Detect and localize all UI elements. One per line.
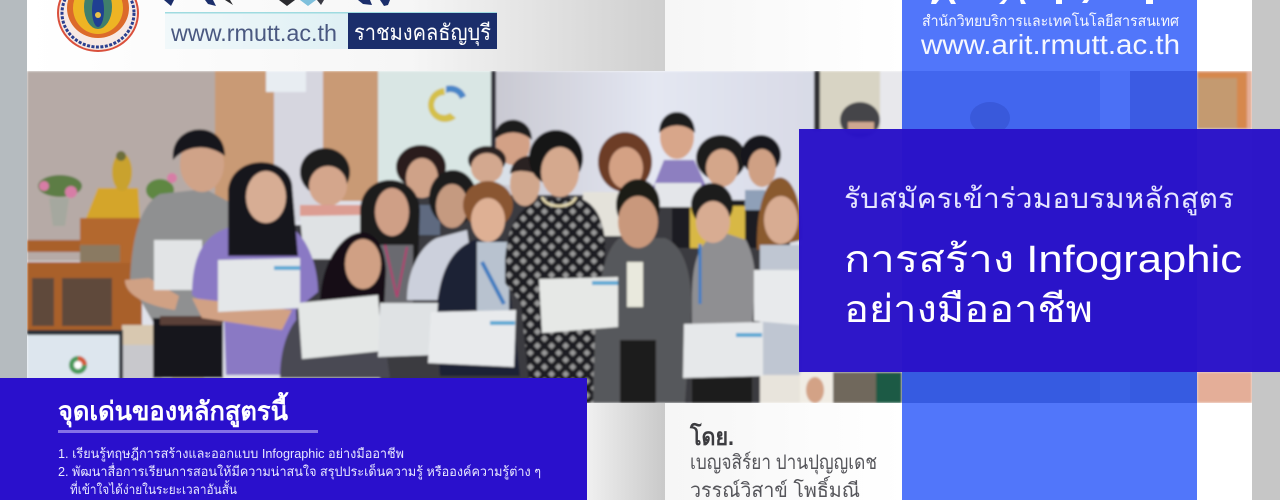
woman with auburn hair [757,177,802,403]
man in grey shirt [125,129,233,378]
ARIT website: www.arit.rmutt.ac.th [920,29,1180,60]
man top left at back [494,120,532,185]
woman with glasses and lanyard [360,180,420,305]
highlights heading: จุดเด่นของหลักสูตรนี้ [58,391,289,428]
highlight list [58,446,541,497]
title: line 2: การสร้าง Infographic [844,239,1242,281]
back row people [396,112,781,248]
woman in patterned dress [505,130,605,403]
ARIT logo cropped letters [931,0,1153,4]
woman in grey jacket [593,179,691,403]
authors [689,422,877,500]
photo background: room walls [27,71,1252,403]
highlight list: ที่เข้าใจได้ง่ายในระยะเวลาอันสั้น [70,480,237,497]
highlight list: 2. พัฒนาสื่อการเรียนการสอนให้มีความน่าสนใจ สรุปประเด็นความรู้ หรือองค์ความรู้ต่าง ๆ [58,462,541,480]
small face behind dress woman [510,156,542,206]
ARIT department name: สำนักวิทยบริการและเทคโนโลยีสารสนเทศ [922,12,1179,30]
blue column [902,0,1197,500]
group photo [27,71,1252,403]
certificates [298,270,800,378]
curly hair woman [655,135,760,248]
woman in front with dark hair [280,232,390,378]
highlights panel [0,378,587,500]
highlight list: 1. เรียนรู้ทฤษฎีการสร้างและออกแบบ Infographic อย่างมืออาชีพ [58,446,404,462]
Thai name badge [348,13,497,49]
cup on desk [172,376,204,378]
website banner [165,12,497,49]
right side portrait frame [1197,71,1252,403]
person behind blue column [800,102,902,403]
logo: cropped RMUTT letters [164,0,390,6]
man with glasses at back [652,112,708,190]
woman brown hair at back [583,132,652,236]
authors label: โดย. [689,422,734,451]
title: line 1: รับสมัครเข้าร่วมอบรมหลักสูตร [844,183,1234,216]
man with glasses [300,148,362,259]
Thai name badge: ราชมงคลธัญบุรี [354,20,491,46]
woman with purple shirt [192,162,318,375]
author names [690,451,877,500]
crowd shadow underlay [285,195,790,403]
title: line 3: อย่างมืออาชีพ [844,289,1093,331]
shrine cabinet with Buddha statue [27,151,177,380]
woman in grey polo [691,183,755,403]
woman beside left back [468,146,506,183]
woman with striped top [407,170,477,300]
laptop screen [27,330,123,380]
woman left back [396,145,446,235]
title panel [799,129,1280,372]
author names: เบญจสิร์ยา ปานปุญญเดช [690,451,877,475]
website address: www.rmutt.ac.th [170,20,337,46]
logo: university seal [58,0,138,51]
woman in navy jacket [436,181,520,376]
man in black at back right [741,135,781,210]
